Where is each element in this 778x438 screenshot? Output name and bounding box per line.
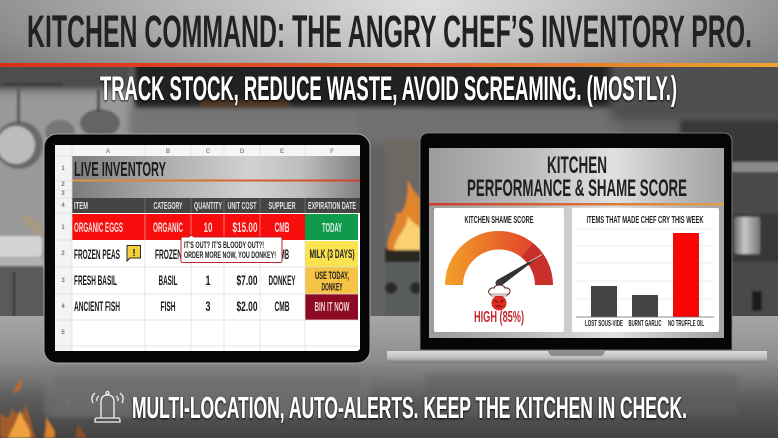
header row: QUANTITY: [194, 201, 222, 212]
callout: ORDER MORE NOW, YOU DONKEY!: [184, 250, 276, 261]
bar labels: NO TRUFFLE OIL: [668, 318, 704, 328]
callout: IT’S OUT? IT’S BLOODY OUT?!: [184, 240, 264, 251]
bar: burnt garlic: [632, 295, 658, 317]
callout: [181, 235, 282, 262]
bar labels: BURNT GARLIC: [628, 318, 662, 328]
row: frozen peas: FROZEN PEAS: [74, 247, 120, 262]
dashboard heading: [467, 152, 687, 202]
row numbers: [61, 166, 65, 336]
column letters: A: [106, 149, 111, 155]
row: organic eggs: CMB: [274, 220, 290, 235]
row numbers: 2: [61, 182, 65, 188]
gauge needle: [496, 254, 542, 286]
row: frozen peas: MB: [280, 247, 289, 262]
row: frozen peas: FROZEN: [155, 247, 182, 262]
icon: angry chef: [489, 285, 510, 310]
sheet title band: [72, 156, 360, 198]
row: organic eggs: ORGANIC: [153, 220, 183, 235]
icon: warning speech bubble: [127, 246, 140, 261]
row: organic eggs: 10: [204, 220, 212, 235]
header row: CATEGORY: [154, 201, 183, 212]
row: organic eggs: [72, 214, 358, 240]
row numbers: 5: [61, 330, 65, 336]
row numbers: 2: [61, 251, 65, 257]
tablet: [44, 134, 370, 363]
row: fresh basil: DONKEY: [268, 273, 296, 288]
bar: lost sous-vide: [591, 286, 617, 317]
row: ancient fish: $2.00: [236, 299, 258, 314]
column letters: C: [206, 149, 211, 155]
laptop: [387, 133, 767, 363]
header row: UNIT COST: [228, 201, 256, 212]
row: fresh basil: BASIL: [158, 273, 178, 288]
row numbers: 4: [61, 304, 65, 310]
bar: no truffle oil: [673, 233, 699, 317]
row: ancient fish: BIN IT NOW: [314, 299, 350, 314]
header row: ITEM: [74, 201, 88, 212]
panel: shame score gauge: HIGH (85%): [474, 309, 524, 326]
header row: SUPPLIER: [268, 201, 296, 212]
counter top: [0, 316, 778, 438]
flames bottom left: [0, 357, 86, 438]
icon: warning speech bubble: !: [132, 248, 136, 259]
row: fresh basil: 1: [206, 273, 211, 288]
column letters: D: [240, 149, 245, 155]
top metallic banner: [0, 0, 778, 67]
kitchen background: [0, 50, 778, 340]
row numbers: 4: [61, 203, 65, 209]
dashboard heading: KITCHEN: [547, 152, 607, 179]
row: fresh basil: [74, 267, 358, 294]
row: fresh basil: DONKEY: [322, 282, 343, 294]
row: fresh basil: FRESH BASIL: [74, 273, 117, 288]
bar labels: LOST SOUS-VIDE: [585, 318, 623, 328]
row: frozen peas: [74, 241, 358, 267]
gauge arc: [445, 231, 553, 285]
row: ancient fish: FISH: [160, 299, 176, 314]
dashboard screen: [429, 148, 724, 338]
row numbers: 1: [61, 225, 65, 231]
orange rule: [0, 63, 778, 67]
row numbers: 1: [61, 166, 65, 172]
spreadsheet screen: [55, 145, 360, 351]
row: ancient fish: [74, 294, 358, 320]
header row: [72, 198, 360, 213]
panel: shame score gauge: [434, 208, 564, 332]
row: ancient fish: 3: [206, 299, 211, 314]
column letters: F: [330, 149, 334, 155]
column letters: E: [280, 149, 284, 155]
row numbers: 3: [61, 278, 65, 284]
row: organic eggs: $15.00: [232, 220, 258, 235]
row: organic eggs: TODAY: [322, 220, 342, 235]
column letters: B: [166, 149, 171, 155]
sheet title band: LIVE INVENTORY: [74, 158, 166, 181]
row numbers: 3: [61, 191, 65, 197]
row: ancient fish: ANCIENT FISH: [74, 299, 120, 314]
bar labels: [585, 318, 704, 328]
row: fresh basil: $7.00: [236, 273, 258, 288]
panel: shame score gauge: KITCHEN SHAME SCORE: [464, 214, 534, 226]
row: ancient fish: CMB: [274, 299, 290, 314]
row: fresh basil: USE TODAY,: [315, 270, 349, 282]
row: organic eggs: ORGANIC EGGS: [74, 220, 123, 235]
row: frozen peas: MILK (3 DAYS): [310, 247, 354, 261]
column letters: [106, 149, 334, 155]
icon: alarm siren: [92, 392, 123, 422]
panel: bar chart: [572, 208, 719, 332]
header row: EXPIRATION DATE: [308, 201, 356, 212]
laptop base: [387, 351, 767, 363]
